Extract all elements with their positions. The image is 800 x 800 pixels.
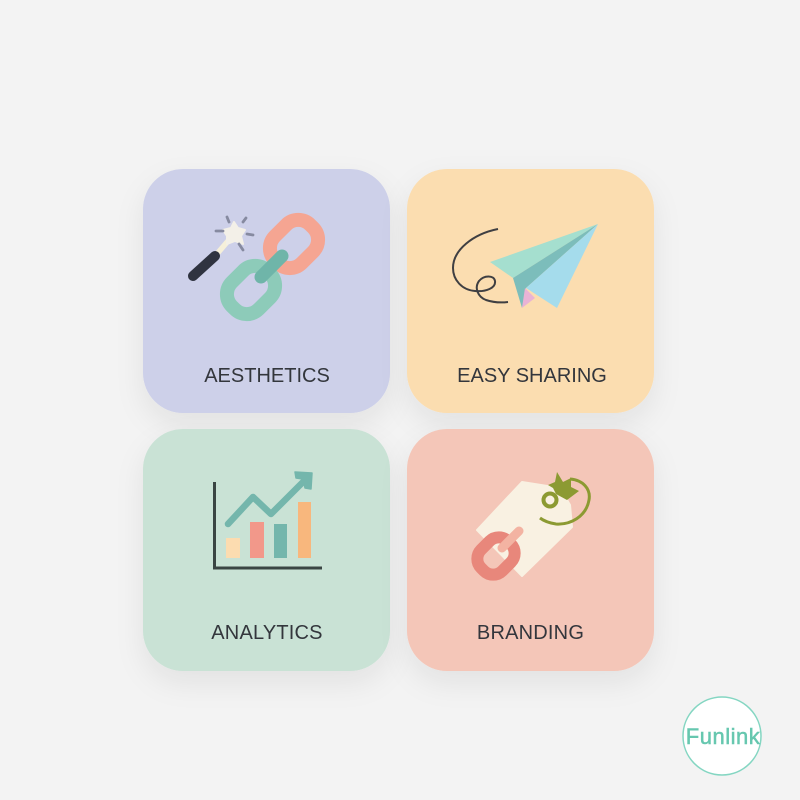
icon: price tag (477, 482, 572, 576)
logo: funlink: Funlink (686, 724, 761, 749)
label: branding: BRANDING (477, 622, 584, 644)
panel: easy sharing (407, 169, 654, 413)
panel: analytics (143, 429, 390, 671)
icon: olive crown and string (540, 472, 589, 524)
logo: funlink (683, 697, 761, 775)
icon: chain links (220, 213, 325, 321)
icon: curly trail (453, 229, 508, 302)
label: aesthetics: AESTHETICS (204, 365, 330, 387)
panel: branding (407, 429, 654, 671)
icon: paper airplane (490, 224, 598, 308)
icon: bar chart (214, 472, 322, 568)
panel: aesthetics (143, 169, 390, 413)
icon: coral link (472, 531, 520, 580)
label: easy sharing: EASY SHARING (457, 365, 607, 387)
icon: magic wand (193, 217, 253, 276)
label: analytics: ANALYTICS (211, 622, 323, 644)
